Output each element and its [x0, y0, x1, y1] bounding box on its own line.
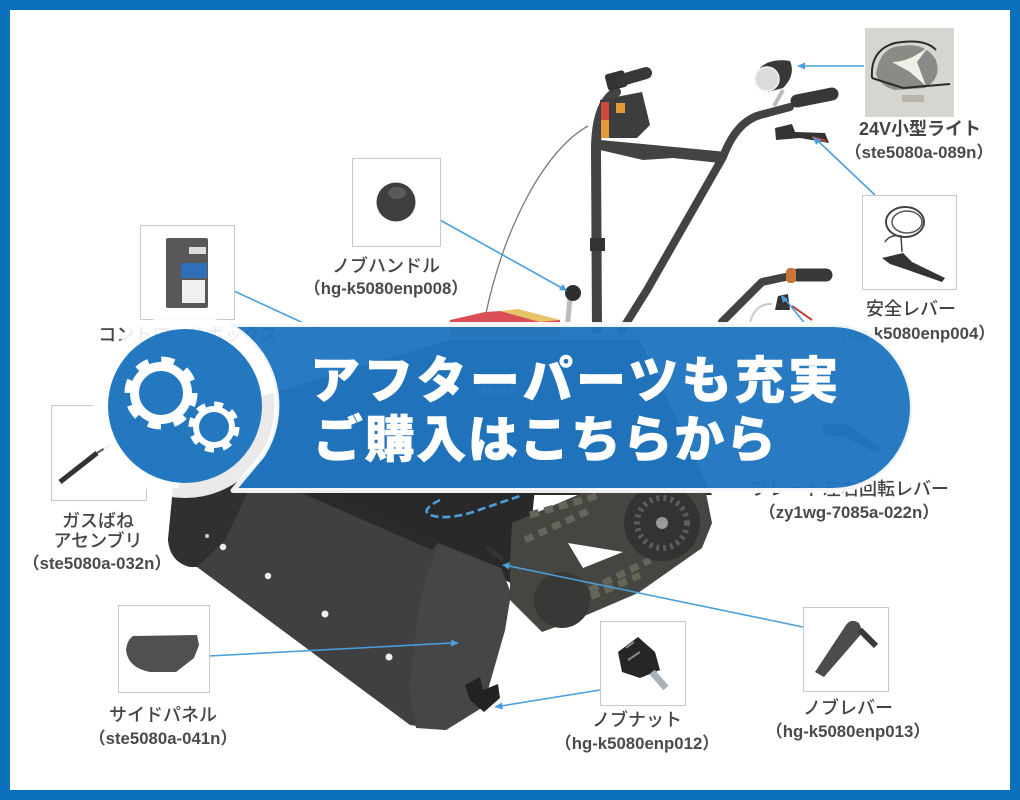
- part: side panel: [89, 606, 237, 748]
- label: control box: （5080e-129n）: [121, 349, 245, 368]
- label: safety lever: （hg-k5080enp004）: [831, 324, 995, 343]
- dashed blue cable guide: [427, 496, 520, 517]
- snowblower machine photo: [168, 60, 832, 730]
- arrow: lower lever: [781, 295, 853, 383]
- snow blade: [168, 488, 511, 730]
- part: safety lever: [831, 196, 995, 343]
- label: knob nut: ノブナット: [592, 709, 682, 730]
- red and yellow hood: [450, 310, 560, 335]
- banner body: [228, 324, 912, 490]
- headlight: [755, 60, 792, 106]
- banner headline: アフターパーツも充実: [310, 341, 842, 413]
- label: knob nut: （hg-k5080enp012）: [555, 734, 719, 753]
- label: knob handle: ノブハンドル: [332, 255, 440, 276]
- label: knob nut: [555, 709, 719, 753]
- arrow: safety lever: [813, 137, 875, 195]
- arrow: knob handle: [440, 220, 567, 291]
- part: knob nut: [555, 622, 719, 753]
- gear badge: [108, 329, 262, 483]
- machine body: [175, 340, 712, 495]
- label: control box: コントロールボックス: [98, 325, 278, 345]
- label: safety lever: [831, 299, 995, 343]
- label: gas spring: アセンブリ: [53, 530, 143, 551]
- banner headline: [310, 341, 842, 472]
- arrow: headlight: [797, 62, 864, 70]
- label: gas spring: （ste5080a-032n）: [23, 554, 171, 573]
- part: knob handle: [304, 158, 468, 298]
- label: 24V light: （ste5080a-089n）: [845, 143, 993, 162]
- label: blade rotation lever: ブレード左右回転レバー: [751, 478, 949, 499]
- label: knob handle: [304, 255, 468, 298]
- label: side panel: [89, 705, 237, 748]
- label: gas spring: ガスばね: [62, 511, 134, 531]
- label: control box: [98, 325, 278, 368]
- lower handle: [722, 268, 826, 322]
- label: side panel: サイドパネル: [109, 705, 217, 725]
- label: 24V light: 24V小型ライト: [859, 119, 981, 139]
- label: side panel: （ste5080a-041n）: [89, 729, 237, 748]
- arrow: knob nut: [494, 690, 600, 710]
- icon: small gear: [191, 404, 237, 450]
- label: blade rotation lever: [751, 478, 949, 522]
- right handle: [622, 94, 832, 330]
- label: gas spring: [23, 511, 171, 573]
- banner: [93, 314, 912, 498]
- tracks: [510, 485, 712, 632]
- label: knob lever: （hg-k5080enp013）: [766, 722, 930, 741]
- arrow: knob lever: [502, 562, 803, 627]
- label: safety lever: 安全レバー: [866, 299, 956, 319]
- icon: large gear: [128, 360, 194, 426]
- label: knob handle: （hg-k5080enp008）: [304, 279, 468, 298]
- part: gas spring: [23, 406, 171, 573]
- part: blade rotation lever: [751, 423, 949, 522]
- arrow: control box: [234, 291, 470, 400]
- banner headline: ご購入はこちらから: [313, 400, 777, 472]
- label: blade rotation lever: （zy1wg-7085a-022n）: [759, 503, 939, 522]
- throttle cable: [486, 126, 588, 313]
- snowblower machine photo: HAIGE: [476, 383, 518, 398]
- part: 24V light: [845, 28, 993, 162]
- gear badge ring: [93, 314, 277, 498]
- engine area: [320, 488, 535, 590]
- part: control box: [98, 226, 278, 368]
- left handle: [590, 70, 727, 330]
- label: 24V light: [845, 119, 993, 162]
- label: knob lever: ノブレバー: [803, 697, 893, 718]
- part: knob lever: [766, 608, 930, 741]
- label: knob lever: [766, 697, 930, 741]
- arrow: side panel: [209, 640, 459, 656]
- shift knob: [565, 285, 581, 330]
